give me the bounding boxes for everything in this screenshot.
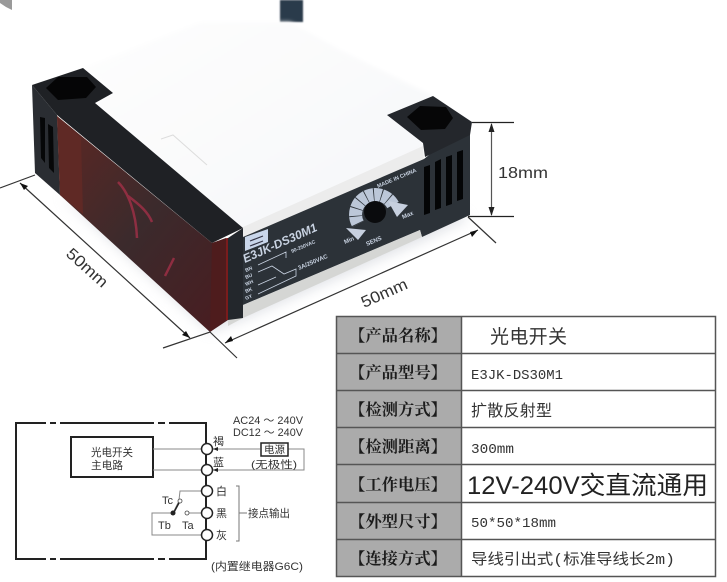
icon: vent slots — [424, 150, 463, 215]
dimension: bottom 50mm — [225, 217, 496, 343]
wires — [152, 449, 304, 541]
terminals — [202, 444, 212, 540]
wire colour labels: 灰 — [216, 528, 227, 542]
sensor label: 90-250VAC — [290, 239, 317, 255]
dimension: bottom 50mm: 50mm — [359, 276, 410, 312]
power supply — [251, 443, 297, 471]
contact labels — [158, 495, 290, 532]
row: connection: 导线引出式(标准导线长2m) — [471, 551, 675, 569]
adjustment dial: Max — [401, 210, 415, 221]
sensor label: BU — [244, 272, 254, 281]
contact labels: Ta — [182, 520, 194, 532]
spec table — [336, 316, 716, 577]
supply voltage text: DC12 ～ 240V — [233, 427, 304, 439]
row: product name: 光电开关 — [490, 326, 567, 349]
sensor label: GY — [244, 293, 254, 302]
contact labels: Tb — [158, 520, 171, 532]
row: dimensions: 50*50*18mm — [471, 516, 556, 532]
icon: mounting hole left — [46, 77, 96, 100]
power supply: 电源 — [264, 443, 285, 456]
adjustment dial: SENS — [365, 236, 383, 248]
row: model: E3JK-DS30M1 — [471, 368, 563, 384]
main circuit box: 光电开关 — [91, 445, 133, 459]
row: detection distance: 300mm — [471, 442, 514, 458]
row: connection: 【连接方式】 — [349, 549, 447, 568]
sensor label: E3JK-DS30M1 — [241, 220, 320, 266]
sensor label: 3A/250VAC — [297, 254, 329, 272]
row: working voltage: 12V-240V交直流通用 — [467, 472, 708, 500]
wire colour labels: 蓝 — [213, 456, 224, 469]
housing outline — [16, 423, 206, 559]
adjustment dial — [343, 168, 418, 248]
sensor label: BN — [244, 265, 254, 274]
contact labels: Tc — [162, 495, 174, 507]
sensor label: WH — [244, 279, 255, 288]
wiring diagram — [16, 415, 304, 573]
row: detection distance — [349, 437, 514, 458]
supply voltage text: AC24 ～ 240V — [233, 415, 304, 427]
row: working voltage: 【工作电压】 — [349, 476, 447, 494]
dimension: 18mm: 18mm — [498, 165, 548, 182]
row: detection method: 【检测方式】 — [349, 400, 447, 419]
main circuit box: 主电路 — [91, 459, 123, 472]
wire colour labels: 黑 — [216, 507, 227, 520]
row: detection method — [349, 400, 552, 421]
row: product name: 【产品名称】 — [349, 327, 447, 345]
adjustment dial: MADE IN CHINA — [376, 168, 418, 190]
icon: photoelectric sensor photo — [0, 0, 472, 332]
supply voltage text — [233, 415, 304, 439]
main circuit box — [71, 437, 153, 477]
dimension: left 50mm: 50mm — [62, 245, 111, 291]
sensor label: BK — [244, 286, 254, 295]
power supply: (无极性) — [251, 458, 297, 471]
contact labels: 接点输出 — [248, 506, 290, 520]
adjustment dial: Min — [343, 236, 356, 246]
row: detection method: 扩散反射型 — [471, 402, 552, 421]
sensor label — [241, 220, 329, 302]
dimension: left 50mm — [0, 175, 237, 358]
row: product name — [349, 326, 567, 349]
dimension: 18mm — [468, 122, 548, 216]
wire colour labels — [213, 434, 227, 542]
relay note: (内置继电器G6C) — [211, 559, 303, 573]
row: model: 【产品型号】 — [349, 364, 447, 382]
wire colour labels: 白 — [216, 484, 227, 498]
icon: mounting hole right — [407, 106, 453, 130]
row: dimensions: 【外型尺寸】 — [349, 512, 447, 531]
row: working voltage — [349, 472, 708, 500]
row: dimensions — [349, 512, 556, 532]
row: connection — [349, 549, 675, 569]
row: model — [349, 364, 563, 384]
wire colour labels: 褐 — [213, 434, 224, 448]
row: detection distance: 【检测距离】 — [349, 437, 447, 456]
